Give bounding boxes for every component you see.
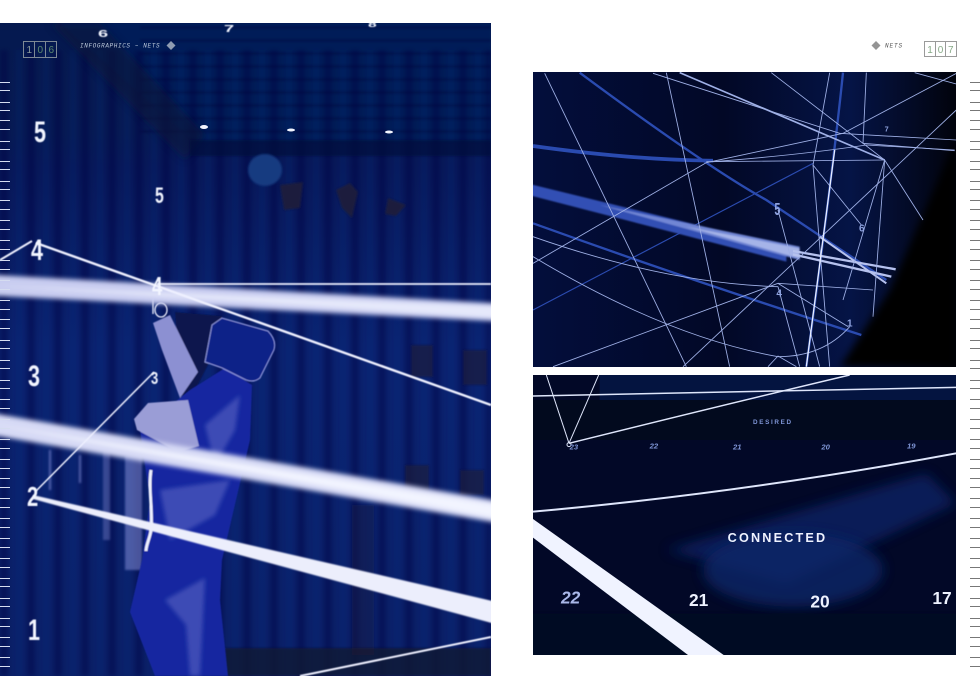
beam: lower widening: [33, 495, 510, 628]
corrugated wall: [0, 50, 491, 676]
stencilled floor text: CONNECTED: [728, 531, 827, 545]
painted numerals: 2: [27, 482, 38, 513]
stencilled floor text: 21: [689, 590, 709, 610]
left page number: 6: [48, 45, 54, 56]
white drip on torso: [146, 470, 151, 551]
numerals on wall: 7: [885, 125, 889, 134]
painted numerals: 5: [34, 114, 46, 149]
blue string lines: [533, 73, 886, 367]
hand loop: [153, 298, 167, 317]
light sleeve: [134, 400, 199, 452]
numerals on wall: [774, 125, 889, 330]
bright diagonal beam: [533, 519, 724, 655]
body highlights: [160, 395, 240, 676]
photo: web of strings: [520, 72, 956, 367]
painted numerals: 3: [28, 358, 40, 393]
numerals on wall: 4: [776, 289, 782, 300]
stencilled floor text: 20: [820, 442, 831, 451]
numerals on wall: 5: [774, 200, 780, 220]
right page number: 1: [927, 45, 933, 56]
right page number: 0: [938, 45, 944, 56]
numerals on wall: 1: [847, 319, 853, 330]
stencilled floor text: 21: [732, 442, 742, 451]
left page number: [24, 42, 56, 58]
stencilled floor text: 23: [569, 442, 579, 451]
upper wall band: [600, 375, 956, 400]
ceiling of container: [106, 24, 490, 49]
vertical drips: [49, 450, 142, 570]
split beam tips: [793, 237, 896, 283]
stencilled floor text: [560, 419, 952, 611]
painted numerals: 4: [31, 232, 43, 267]
stencilled floor text: DESIRED: [753, 419, 793, 426]
thin strings: [0, 241, 491, 676]
painted numerals: 3: [151, 369, 158, 389]
stencilled floor text: 22: [560, 587, 581, 607]
right ruler ticks: [970, 82, 980, 666]
floor glow: [666, 473, 956, 583]
right page number: 7: [948, 45, 954, 56]
right page number: [924, 42, 956, 56]
ceiling marks: [200, 125, 393, 134]
worker figure: [130, 298, 275, 676]
stencilled floor text: 19: [907, 442, 916, 451]
beam: out of focus upper: [0, 274, 510, 322]
painted numerals: 8: [368, 20, 377, 29]
left ruler ticks: [0, 82, 10, 666]
stencilled floor text: 20: [810, 591, 830, 611]
right diamond marker: [872, 41, 880, 50]
left diamond marker: [166, 41, 176, 50]
photo: floor markings: [533, 375, 956, 655]
raised arm: [153, 315, 198, 398]
painted numerals: 6: [98, 29, 108, 40]
painted numerals: 7: [224, 24, 234, 35]
stencilled floor text: 22: [649, 442, 659, 451]
left page number: 0: [38, 45, 44, 56]
left running head: INFOGRAPHICS – NETS: [80, 42, 160, 50]
painted numerals: 5: [155, 185, 164, 209]
bright vertical string: [806, 150, 835, 367]
left page number: 1: [26, 45, 32, 56]
thin strings: [533, 375, 956, 512]
rust patches: [225, 182, 491, 676]
numerals on wall: 6: [859, 224, 865, 235]
painted numerals: [27, 20, 377, 647]
wide out-of-focus beam: [520, 182, 800, 262]
shadow between arm and hood: [175, 312, 222, 396]
painted numerals: 1: [28, 612, 40, 647]
body: [130, 368, 252, 676]
pale strings: [533, 73, 956, 367]
hood: [205, 318, 275, 381]
right running head: NETS: [885, 42, 903, 50]
painted numerals: 4: [152, 271, 163, 301]
beam: out of focus middle: [0, 411, 510, 525]
left page photo: worker threading lines in a container: [0, 20, 510, 676]
stencilled floor text: 17: [932, 588, 952, 608]
